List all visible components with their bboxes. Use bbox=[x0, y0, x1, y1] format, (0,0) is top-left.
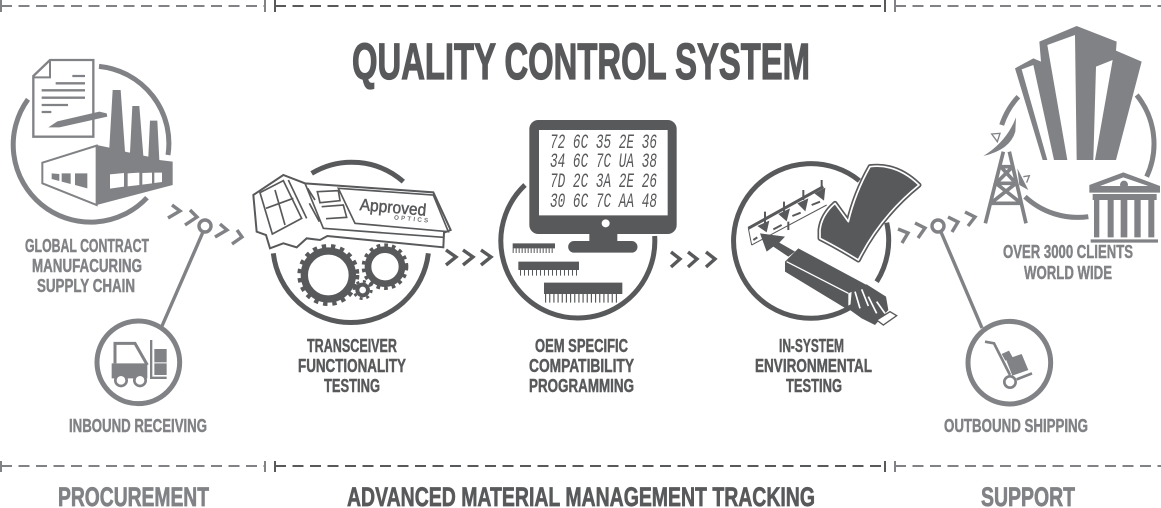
label: outbound shipping: OUTBOUND SHIPPING bbox=[944, 416, 1088, 436]
icon: factory and contract bbox=[13, 60, 173, 222]
monitor hex text: 30 6C 7C AA 48 bbox=[550, 191, 657, 214]
label: OEM programming: OEM SPECIFIC bbox=[535, 336, 628, 356]
arrows: procurement chevrons bbox=[168, 205, 242, 244]
label: transceiver testing: TRANSCEIVER bbox=[307, 336, 397, 356]
label: environmental testing bbox=[755, 336, 872, 396]
label: environmental testing: IN-SYSTEM bbox=[779, 336, 844, 356]
arrows: chevrons to programming bbox=[446, 250, 491, 265]
arrows: support chevrons bbox=[898, 212, 975, 243]
title: QUALITY CONTROL SYSTEM bbox=[352, 33, 810, 90]
connector: outbound bbox=[932, 220, 982, 328]
icon: transceiver and gears: Approved bbox=[359, 195, 427, 220]
label: over 3000 clients: WORLD WIDE bbox=[1024, 263, 1112, 283]
label: transceiver testing bbox=[298, 336, 406, 396]
label: transceiver testing: TESTING bbox=[324, 376, 380, 396]
icon: transceiver and gears bbox=[253, 162, 451, 323]
icon: monitor and chips bbox=[501, 120, 677, 318]
monitor hex text: 7D 2C 3A 2E 26 bbox=[550, 171, 657, 194]
arrows: chevrons to environmental bbox=[671, 252, 715, 267]
icon: hand truck bbox=[968, 321, 1051, 404]
icon: skyline, tower and bank bbox=[983, 26, 1160, 243]
monitor hex text bbox=[550, 132, 657, 214]
label: global contract: MANUFACURING bbox=[32, 256, 142, 276]
label: global contract: SUPPLY CHAIN bbox=[37, 276, 135, 296]
monitor hex text: 34 6C 7C UA 38 bbox=[550, 151, 657, 174]
label: inbound receiving: INBOUND RECEIVING bbox=[69, 416, 207, 436]
connector: inbound bbox=[162, 220, 211, 326]
label: transceiver testing: FUNCTIONALITY bbox=[298, 356, 406, 376]
label: global contract: GLOBAL CONTRACT bbox=[25, 236, 149, 256]
label: OEM programming bbox=[529, 336, 634, 396]
label: environmental testing: TESTING bbox=[786, 376, 842, 396]
monitor hex text: 72 6C 35 2E 36 bbox=[550, 132, 657, 155]
icon: forklift bbox=[97, 321, 180, 404]
label: OEM programming: COMPATIBILITY bbox=[529, 356, 634, 376]
icon: environmental test and checkmark bbox=[734, 164, 919, 325]
label: environmental testing: ENVIRONMENTAL bbox=[755, 356, 872, 376]
label: OEM programming: PROGRAMMING bbox=[529, 376, 634, 396]
label: global contract bbox=[25, 236, 149, 296]
label: over 3000 clients bbox=[1003, 242, 1133, 283]
icon: transceiver and gears: OPTICS bbox=[394, 215, 428, 224]
